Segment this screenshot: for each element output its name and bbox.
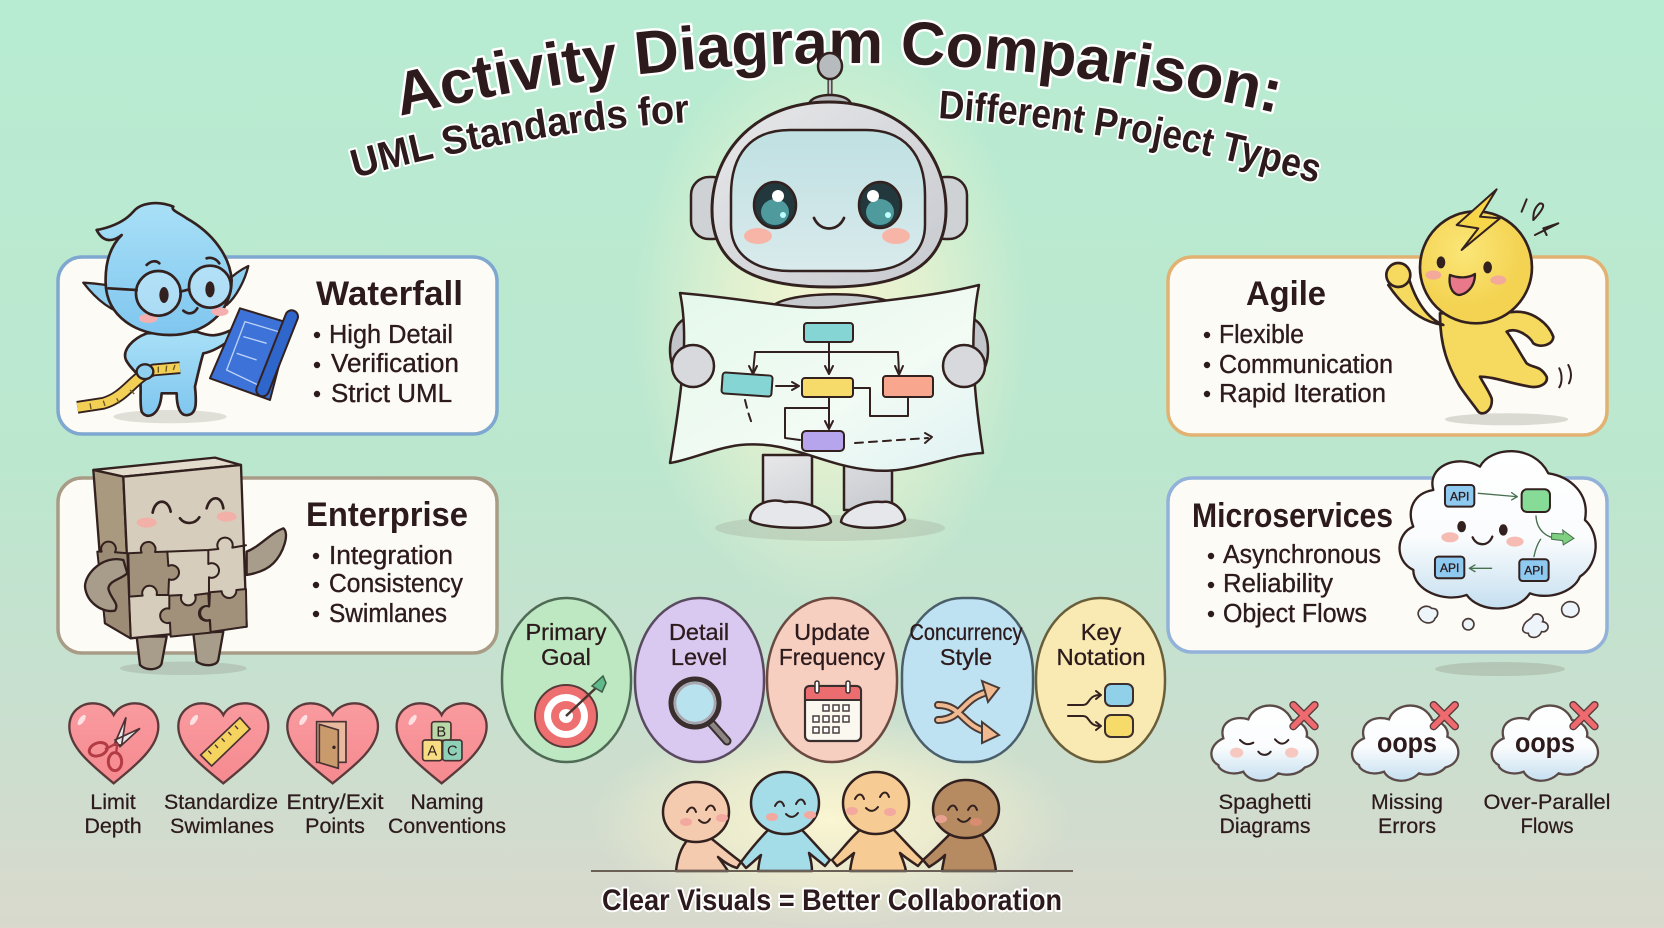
icon: magnifier bbox=[671, 679, 727, 741]
character: Microservices cloud: API bbox=[1450, 489, 1469, 503]
pill: Primary Goal: Primary bbox=[526, 619, 607, 645]
person 4 bbox=[923, 780, 999, 871]
pill: Primary Goal bbox=[502, 598, 631, 762]
heart with scissors bbox=[69, 703, 158, 783]
heading: Enterprise: Enterprise bbox=[306, 496, 468, 534]
bullet list: Agile: Flexible bbox=[1219, 321, 1304, 349]
pill: Concurrency Style bbox=[902, 598, 1033, 762]
character: Agile lightning sprite bbox=[1386, 189, 1571, 425]
pill: Primary Goal: Goal bbox=[541, 644, 591, 670]
pitfalls row bbox=[1211, 705, 1610, 838]
heart with door bbox=[287, 703, 378, 783]
pitfall: Spaghetti Diagrams: Spaghetti bbox=[1218, 790, 1312, 814]
best practice: Limit Depth: Limit bbox=[90, 790, 136, 814]
pill: Update Frequency: Frequency bbox=[779, 644, 885, 670]
bullet list: Enterprise: Consistency bbox=[329, 570, 463, 598]
robot screen face bbox=[731, 130, 925, 271]
pill: Update Frequency bbox=[767, 598, 897, 762]
bullet list: Waterfall bbox=[314, 321, 459, 408]
heart with ruler bbox=[178, 703, 268, 783]
best practice: Naming Conventions: Conventions bbox=[388, 814, 506, 838]
pitfall: Over-Parallel Flows: Flows bbox=[1520, 814, 1574, 838]
robot antenna bbox=[809, 53, 851, 104]
bullet list: Microservices: Object Flows bbox=[1223, 600, 1367, 628]
heading: Waterfall: Waterfall bbox=[316, 275, 463, 313]
bullet list: Microservices: Asynchronous bbox=[1223, 541, 1381, 569]
best practice: Standardize Swimlanes: Standardize bbox=[164, 790, 278, 814]
best practices row bbox=[69, 703, 506, 838]
panel: Microservices bbox=[1168, 478, 1607, 652]
pill: Detail Level: Level bbox=[671, 644, 727, 670]
subtitle right: Different Project Types bbox=[938, 88, 1321, 184]
pill: Concurrency Style: Concurrency bbox=[910, 619, 1023, 645]
glow behind team bbox=[590, 714, 1070, 926]
robot legs and feet bbox=[750, 455, 905, 528]
robot hands bbox=[672, 345, 985, 387]
robot ears bbox=[691, 177, 967, 239]
bullet list: Waterfall: High Detail bbox=[329, 321, 453, 349]
pitfall: Missing Errors: Errors bbox=[1378, 814, 1436, 838]
pill: Detail Level bbox=[635, 598, 764, 762]
person 3 bbox=[832, 772, 923, 871]
best practice: Naming Conventions: Naming bbox=[410, 790, 484, 814]
bullet list: Agile: Rapid Iteration bbox=[1219, 380, 1386, 408]
heading: Microservices: Microservices bbox=[1192, 497, 1393, 535]
pitfall: Over-Parallel Flows: Over-Parallel bbox=[1484, 790, 1610, 814]
pitfall: Spaghetti Diagrams: Diagrams bbox=[1220, 814, 1310, 838]
pitfall: Missing Errors: Missing bbox=[1371, 790, 1443, 814]
person 2 bbox=[741, 772, 830, 871]
best practice: Entry/Exit Points: Points bbox=[305, 814, 365, 838]
bullet list: Agile bbox=[1204, 321, 1393, 408]
title: Activity Diagram Comparison: bbox=[399, 20, 1280, 118]
heading: Agile: Agile bbox=[1246, 275, 1326, 313]
heart with letter blocks: B bbox=[436, 725, 446, 741]
comparison pills bbox=[502, 598, 1165, 762]
best practice: Limit Depth bbox=[69, 703, 158, 838]
sleepy cloud with x mark bbox=[1211, 705, 1318, 781]
glow behind robot bbox=[630, 30, 1030, 610]
bullet list: Microservices bbox=[1208, 541, 1381, 628]
robot arms bbox=[670, 318, 988, 382]
pill: Concurrency Style: Style bbox=[940, 644, 992, 670]
heart with letter blocks: C bbox=[447, 744, 458, 760]
caption: Clear Visuals = Better Collaboration bbox=[602, 884, 1062, 917]
shadow under microservices cloud bbox=[1435, 662, 1565, 676]
diagram nodes bbox=[721, 323, 933, 451]
ground line bbox=[591, 870, 1073, 872]
bullet list: Enterprise: Swimlanes bbox=[329, 600, 447, 628]
best practice: Standardize Swimlanes: Swimlanes bbox=[170, 814, 274, 838]
pitfall: Missing Errors bbox=[1352, 705, 1458, 838]
heart with letter blocks: A bbox=[427, 744, 437, 760]
pitfall: Over-Parallel Flows: oops bbox=[1515, 727, 1575, 758]
icon: target bbox=[535, 676, 606, 747]
best practice: Naming Conventions bbox=[388, 703, 506, 838]
person 1 bbox=[663, 782, 741, 871]
activity diagram sheet bbox=[670, 285, 985, 471]
best practice: Entry/Exit Points bbox=[286, 703, 384, 838]
character: Waterfall drop with blueprint bbox=[77, 203, 292, 423]
bullet list: Enterprise: Integration bbox=[329, 542, 453, 570]
pill: Detail Level: Detail bbox=[669, 619, 729, 645]
bullet list: Waterfall: Verification bbox=[331, 350, 459, 378]
pitfall: Spaghetti Diagrams bbox=[1211, 705, 1318, 838]
subtitle left: UML Standards for bbox=[348, 94, 690, 178]
panel: Enterprise bbox=[58, 478, 497, 653]
best practice: Standardize Swimlanes bbox=[164, 703, 278, 838]
robot neck bbox=[770, 294, 900, 310]
oops cloud with x mark bbox=[1492, 705, 1598, 781]
character: Microservices cloud: API bbox=[1524, 564, 1544, 578]
pill: Key Notation: Key bbox=[1081, 619, 1121, 645]
pitfall: Missing Errors: oops bbox=[1377, 727, 1437, 758]
bullet list: Agile: Communication bbox=[1219, 351, 1393, 379]
pitfall: Over-Parallel Flows bbox=[1484, 705, 1610, 838]
pill: Key Notation: Notation bbox=[1056, 644, 1146, 670]
diagram connectors bbox=[749, 342, 908, 440]
bullet list: Microservices: Reliability bbox=[1223, 570, 1333, 598]
panel: Agile bbox=[1168, 257, 1607, 435]
team holding hands bbox=[663, 772, 999, 871]
heart with letter blocks bbox=[397, 703, 487, 783]
oops cloud with x mark bbox=[1352, 705, 1458, 781]
pill: Key Notation bbox=[1036, 598, 1165, 762]
character: Enterprise puzzle block bbox=[85, 458, 286, 675]
character: Microservices cloud: API bbox=[1440, 561, 1459, 575]
best practice: Entry/Exit Points: Entry/Exit bbox=[286, 790, 384, 814]
robot head bbox=[712, 102, 946, 287]
character: Microservices cloud bbox=[1400, 451, 1596, 637]
panel: Waterfall bbox=[58, 257, 497, 434]
icon: notation boxes bbox=[1068, 684, 1133, 737]
bullet list: Enterprise bbox=[313, 542, 463, 628]
bullet list: Waterfall: Strict UML bbox=[331, 380, 452, 408]
best practice: Limit Depth: Depth bbox=[84, 814, 142, 838]
diagram dashed paths bbox=[745, 400, 928, 443]
icon: calendar bbox=[805, 681, 861, 741]
icon: crossing arrows bbox=[938, 681, 999, 743]
pill: Update Frequency: Update bbox=[794, 619, 870, 645]
